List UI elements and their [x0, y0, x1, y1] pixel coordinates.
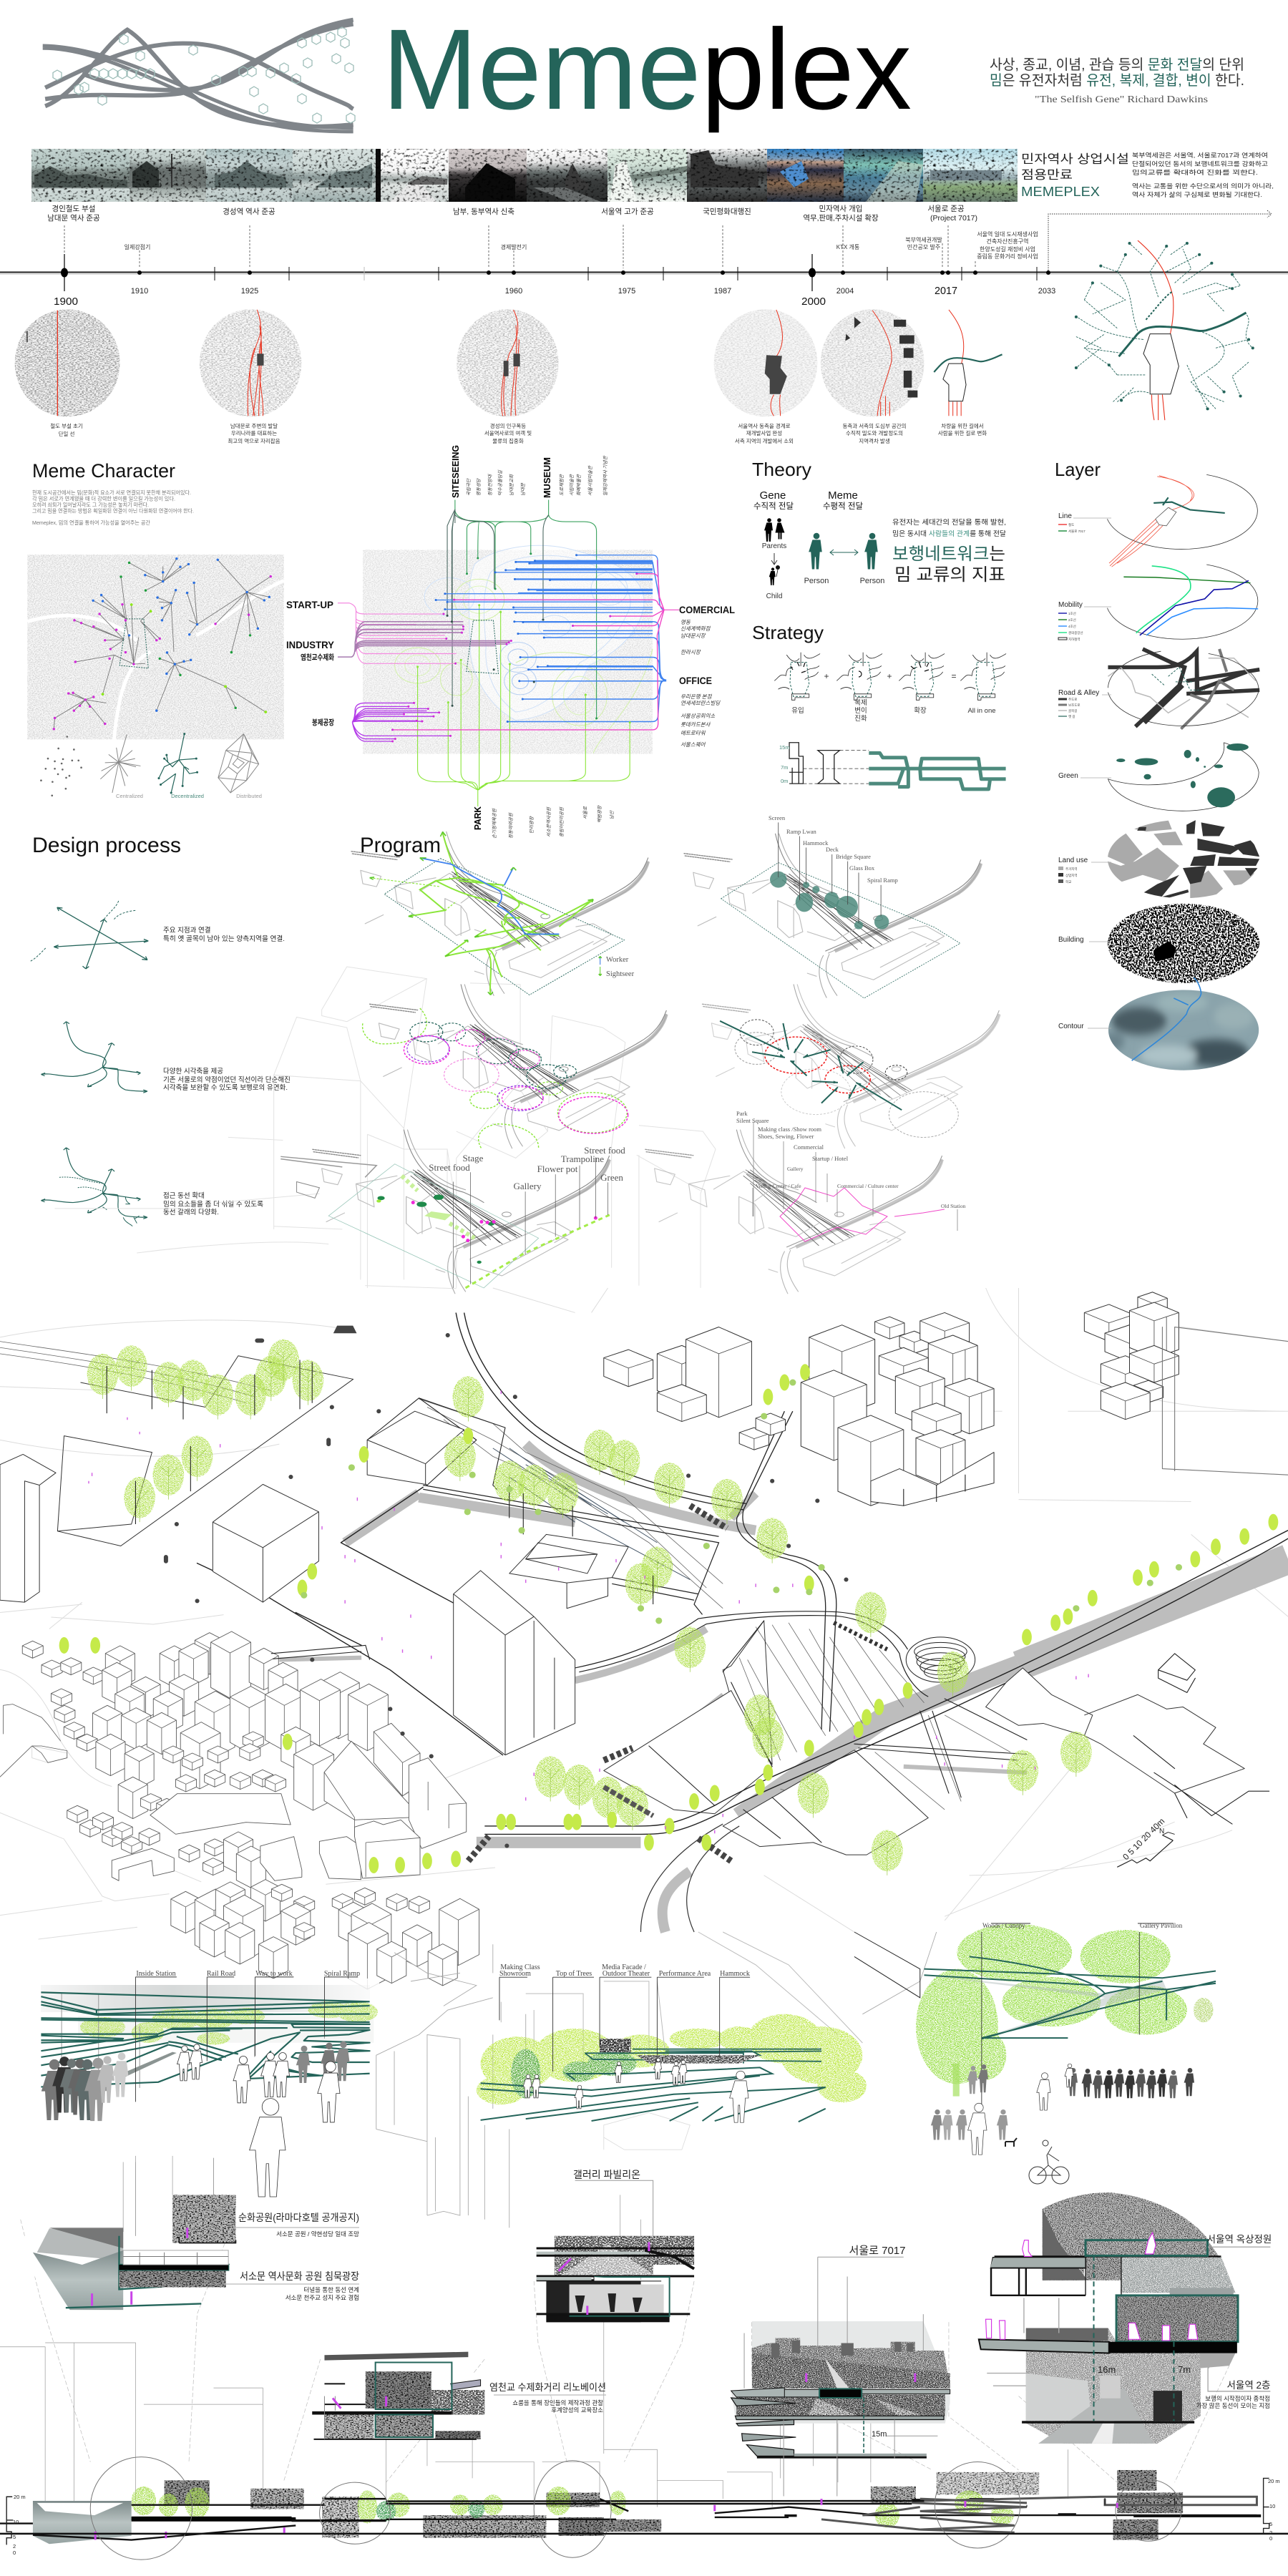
icon: cyclist and dog: [1005, 2138, 1069, 2184]
chart: meme links over contour map: 중림어린이공원: [559, 806, 565, 837]
history map circles: 남대문로 주변의 발달: [230, 422, 278, 429]
section diagram: levels 0m 7m 15m: 0m: [781, 778, 788, 784]
history map circles: 재개발사업 완성: [746, 429, 782, 436]
section diagram: levels 0m 7m 15m: 15m: [779, 744, 790, 751]
diagram: gene vs meme transmission: [753, 489, 884, 600]
chart: meme links over contour map: 연세세브란스빌딩: [680, 700, 721, 706]
chart: meme links over contour map: 시립미술관: [569, 474, 575, 496]
chart: meme links over contour map: 일제강제역사 기념관: [602, 455, 608, 496]
heading: Program: Program: [360, 834, 441, 857]
diagram: gene vs meme transmission: Person: [860, 577, 884, 585]
strategy axonometric: program elements: Glass Box: [849, 864, 875, 872]
detail circle: Seosomun park: [21, 2195, 359, 2312]
timeline: 1925: [241, 287, 258, 296]
timeline: 국민평화대행진: [703, 208, 751, 216]
chart: meme links over contour map: 서울스퀘어: [680, 741, 706, 748]
program: uses axonometric: Flower pot: [537, 1163, 578, 1174]
perspective: central garden: Hammock: [720, 1970, 750, 1978]
strategy diagrams: +: [887, 671, 892, 681]
detail circle: Yeomcheongyo shoe street: 염천교 수제화거리 리노베이션: [489, 2382, 606, 2393]
meme character paragraph: Memeplex, 밈의 연결을 통하여 가능성을 열어주는 공간: [32, 519, 150, 526]
program: uses axonometric: Stage: [463, 1153, 484, 1163]
strategy diagrams: 확장: [914, 706, 927, 715]
layer stack maps: 골목길: [1068, 708, 1077, 713]
timeline: 2017: [935, 285, 957, 297]
detail circle: Yeomcheongyo shoe street: [312, 2352, 606, 2439]
strategy axonometric: commercial programs: [645, 1110, 966, 1294]
chart: meme links over contour map: 정동전망대: [487, 474, 493, 496]
chart: meme links over contour map: 도로체험관: [559, 474, 565, 496]
callout: pedestrian network as meme index: [892, 518, 1006, 585]
chart: meme links over contour map: OFFICE: [679, 675, 712, 686]
layer stack maps: 4호선: [1068, 624, 1076, 628]
layer stack maps: [1058, 474, 1259, 1070]
strategy axonometric: commercial programs: Shoes, Sewing, Flower: [758, 1133, 814, 1140]
chart: meme links over contour map: SITESEEING: [450, 445, 461, 498]
project summary text: 역사는 교통을 위한 수단으로서의 의미가 아니라,: [1132, 182, 1274, 190]
timeline: 2004: [836, 287, 854, 296]
design process step diagrams: 시각축을 보완할 수 있도록 보행로의 유연화.: [163, 1083, 288, 1092]
callout: pedestrian network as meme index: 밈은 동시대 사람들의 관계를 통해 전달: [892, 530, 1006, 538]
timeline: 1900: [54, 296, 78, 308]
perspective: central garden: [477, 1932, 867, 2122]
detail circle: Seosomun park: 서소문 공원 / 약현성당 일대 조망: [276, 2230, 359, 2238]
layer stack maps: Mobility: [1058, 601, 1083, 609]
chart: meme links over contour map: 화폐박물관: [576, 474, 582, 496]
meme character paragraph: 현재 도시공간에서는 밈(문화)적 요소가 서로 연결되지 못한채 분리되어있다.: [32, 489, 191, 496]
layer stack maps: 경의중앙선: [1068, 630, 1083, 635]
typology labels: Centralized: [116, 793, 143, 799]
perspective: central garden: Media Facade /: [602, 1963, 646, 1971]
diagram: gene vs meme transmission: Parents: [762, 542, 786, 550]
timeline: 경성역 역사 준공: [223, 207, 275, 216]
chart: meme links over contour map: 손기정체육공원: [492, 808, 497, 839]
chart: meme links over contour map: 우리은행 본점: [680, 693, 713, 700]
chart: meme links over contour map: 만리광장: [529, 816, 535, 834]
project summary text: 민자역사 상업시설: [1021, 152, 1129, 166]
chart: meme links over contour map: 명동: [680, 619, 691, 625]
timeline: 중림동 문화거리 정비사업: [977, 253, 1038, 260]
project summary text: 점용만료: [1021, 168, 1073, 182]
perspective: inside station: Spiral Ramp: [324, 1970, 360, 1978]
chart: meme links over contour map: MUSEUM: [542, 457, 552, 498]
layer stack maps: 보조도로: [1068, 703, 1080, 707]
strategy diagrams: 변이: [854, 707, 867, 715]
detail circle: Seoul station: 7m: [1178, 2364, 1191, 2375]
history map circles: 동측과 서측의 도심부 공간의: [842, 422, 907, 429]
title: Memeplex: [382, 5, 912, 133]
design process step diagrams: 주요 지점과 연결: [163, 926, 210, 935]
program: uses axonometric: Street food: [584, 1145, 625, 1156]
detail circle: Yeomcheongyo shoe street: 쇼룸을 통해 장인들의 제작과정 관찰: [512, 2399, 603, 2406]
design process step diagrams: 특히 옛 골목이 남아 있는 양측지역을 연결.: [163, 935, 285, 943]
subtitle: definition of meme: "The Selfish Gene" Richard Dawkins: [1035, 94, 1208, 104]
layer stack maps: 지하철역: [1068, 637, 1080, 642]
chart: meme links over contour map: 백범광장: [597, 805, 602, 823]
project summary text: MEMEPLEX: [1021, 185, 1100, 199]
network typologies: [41, 734, 259, 796]
program: uses axonometric: Green: [600, 1172, 623, 1183]
plaza blocks: [57, 1356, 353, 1546]
timeline: 2000: [801, 296, 826, 308]
layer stack maps: 주도로: [1068, 698, 1077, 702]
diagram: gene vs meme transmission: Gene: [760, 489, 786, 502]
long bottom section: 0: [13, 2550, 16, 2556]
timeline: 1975: [618, 287, 635, 296]
strategy diagrams: All in one: [967, 707, 996, 715]
perspective: inside station: Way to work: [255, 1970, 293, 1978]
logo: DNA strands with hexagon molecules: [43, 20, 355, 132]
detail circle: Seoul station: 16m: [1098, 2364, 1116, 2375]
detail circle: Seoullo 7017: 서울로 7017: [849, 2245, 905, 2257]
chart: meme links over contour map: 서울로: [582, 806, 588, 819]
history map circles: [15, 240, 1253, 444]
strategy axonometric: program elements: Hammock: [803, 839, 829, 847]
program: uses axonometric: Street food: [429, 1162, 470, 1173]
long bottom section: 0: [1269, 2535, 1272, 2542]
heading: Strategy: Strategy: [752, 622, 824, 643]
timeline: (Project 7017): [930, 214, 977, 223]
subtitle: definition of meme: [990, 57, 1244, 104]
typology labels: Decentralized: [171, 793, 204, 799]
left neighbourhood building cluster: [0, 1615, 501, 1989]
detail circle: Seosomun park: 서소문 역사문화 공원 침묵광장: [240, 2270, 359, 2282]
detail circle: Seoullo 7017: 15m: [872, 2430, 887, 2439]
strategy axonometric: program elements: Ramp Lwan: [786, 828, 817, 835]
detail circle: Yeomcheongyo shoe street: 후계양성의 교육장소: [551, 2406, 603, 2414]
station building: [986, 1668, 1244, 1793]
perspective: canopy and pavilion: [854, 1922, 1216, 2184]
strategy axonometric: program elements: Spiral Ramp: [867, 877, 898, 884]
layer stack maps: 1호선: [1068, 611, 1076, 615]
timeline: 1960: [505, 287, 522, 296]
timeline: 남대문 역사 준공: [47, 214, 100, 223]
heading: Meme Character: Meme Character: [32, 460, 175, 482]
layer stack maps: 주거지역: [1065, 867, 1078, 872]
meme character paragraph: [32, 489, 194, 526]
chart: meme links over contour map: 염천교수제화: [301, 653, 334, 662]
chart: meme links over contour map: 남산: [609, 810, 615, 819]
detail circle: gallery pavilion: [537, 2169, 694, 2322]
strategy axonometric: commercial programs: Park: [736, 1110, 748, 1117]
strategy diagrams: +: [824, 671, 829, 681]
layer stack maps: 학교: [1065, 879, 1071, 884]
history map circles: 서울역사 동측을 경계로: [738, 422, 791, 429]
left tall tower: [0, 1454, 56, 1602]
long bottom section: 5: [1269, 2521, 1272, 2527]
detail circle: Seoullo 7017: [731, 2245, 950, 2496]
long bottom section: 20 m: [1268, 2478, 1280, 2484]
perspective: inside station: [29, 1970, 379, 2197]
timeline: 민자역사 개입: [819, 204, 862, 213]
perspective: canopy and pavilion: Gallery Pavillon: [1140, 1922, 1183, 1929]
strategy diagrams: [775, 653, 1006, 723]
history map circles: 서울역사로의 여객 및: [484, 429, 532, 436]
timeline: KTX 개통: [836, 243, 859, 250]
chart: meme links over contour map: 서울상공회의소: [680, 713, 715, 719]
strategy axonometric: program elements: Screen: [769, 814, 786, 821]
project summary text: 역사 자체가 삶의 구심체로 변화될 기대한다.: [1132, 191, 1262, 198]
ghost tall towers between perspectives: [123, 1932, 937, 2236]
history map circles: 지역격차 발생: [859, 437, 890, 444]
project summary text: [1021, 151, 1274, 199]
layer stack maps: Contour: [1058, 1023, 1084, 1030]
section zoom guide lines and thin frames: [0, 2156, 1232, 2507]
program: node circles axonometric: [363, 985, 666, 1148]
strategy axonometric: commercial programs: Commercial / Culture center: [837, 1183, 899, 1189]
long bottom section: 10: [1269, 2503, 1275, 2509]
perspective: central garden: Performance Area: [659, 1970, 711, 1978]
strategy axonometric: commercial programs: Making class /Show room: [758, 1126, 821, 1133]
design process step diagrams: 동선 갈래의 다양화.: [163, 1208, 219, 1216]
diagram: gene vs meme transmission: Person: [804, 577, 829, 585]
strategy axonometric: commercial programs: Startup / Hotel: [812, 1155, 849, 1162]
spiral ramp: [906, 1637, 975, 1682]
program: uses axonometric: [280, 1130, 625, 1294]
timeline: 서울역 고가 준공: [601, 208, 654, 216]
chart: meme links over contour map: 신세계백화점: [680, 625, 711, 632]
shadow of Seoullo deck: [279, 1444, 1288, 1932]
cross walks: [468, 1506, 731, 1861]
perspective: central garden: Outdoor Theater: [602, 1970, 650, 1978]
chart: meme links over contour map: START-UP: [286, 599, 333, 610]
layer stack maps: Building: [1058, 936, 1084, 944]
layer stack maps: 서울로 7017: [1068, 529, 1085, 534]
chart: meme links over contour map: 봉제공장: [312, 718, 334, 727]
chart: meme links over contour map: INDUSTRY: [286, 639, 335, 650]
design process step diagrams: [29, 901, 291, 1226]
timeline: [0, 204, 1288, 308]
project summary text: 북부역세권은 서울역, 서울로7017과 연계하여: [1132, 151, 1268, 159]
layer stack maps: Road & Alley: [1058, 689, 1099, 697]
timeline: 한양도성길 재정비 사업: [980, 245, 1035, 253]
heading: Layer: Layer: [1055, 459, 1101, 480]
planters, people, vehicles: [89, 1328, 1179, 1845]
design process step diagrams: 접근 동선 확대: [163, 1191, 205, 1200]
program: circulation axonometric: Worker: [606, 956, 629, 964]
detail circle: Seosomun park: 터널을 통한 동선 연계: [304, 2286, 359, 2293]
detail circle: gallery pavilion: 갤러리 파빌리온: [573, 2169, 640, 2180]
history map circles: 수직적 밀도와 개발정도의: [846, 429, 903, 436]
program: uses axonometric: Trampoline: [561, 1153, 604, 1164]
chart: meme links over contour map: 남대문시장: [680, 633, 706, 639]
strategy axonometric: commercial programs: Vendor Center / Cafe: [756, 1183, 801, 1189]
layer stack maps: 상업지역: [1065, 873, 1078, 878]
detail circle: Seosomun park: 순화공원(라마다호텔 공개공지): [238, 2212, 359, 2223]
chart: meme links over contour map: COMERCIAL: [679, 604, 735, 615]
lime tree clusters: [87, 1340, 1092, 1875]
timeline: 1910: [131, 287, 148, 296]
detail circle: Seoul station: [979, 2192, 1272, 2444]
chart: meme links over contour map: 남대문: [520, 482, 526, 496]
diagram: gene vs meme transmission: Meme: [828, 489, 858, 502]
main axonometric drawing of Seoul station area: [0, 1288, 1288, 1932]
long bottom section: 10: [13, 2519, 19, 2525]
section diagram: levels 0m 7m 15m: [779, 743, 1006, 789]
callout: pedestrian network as meme index: 밈 교류의 지표: [894, 565, 1005, 585]
layer stack maps: Land use: [1058, 857, 1088, 864]
chart: meme links over contour map: 서소문역사공원: [546, 806, 552, 837]
history map circles: 사람을 위한 길로 변화: [938, 430, 987, 436]
history map circles: 철도 부설 초기: [50, 422, 83, 429]
Seoullo elevated walkway: [484, 1531, 1288, 1826]
perspective: inside station: Inside Station: [136, 1970, 176, 1978]
layer stack maps: 옛 길: [1068, 714, 1075, 719]
history map circles: 경성의 인구폭등: [490, 422, 526, 429]
callout: pedestrian network as meme index: 보행네트워크는: [892, 545, 1005, 564]
strategy axonometric: commercial programs: Silent Square: [736, 1117, 769, 1124]
project summary text: 단절되어있던 동서의 보행네트워크를 강화하고: [1132, 160, 1268, 167]
timeline: 경인철도 부설: [52, 204, 95, 213]
program: uses axonometric: Gallery: [514, 1181, 542, 1191]
chart: meme links over contour map: 한라시장: [680, 649, 701, 655]
diagram: gene vs meme transmission: 수직적 전달: [753, 501, 794, 511]
far right tower cluster: [1084, 1292, 1179, 1420]
timeline: 건축자산진흥구역: [987, 238, 1028, 245]
callout: pedestrian network as meme index: 유전자는 세대간의 전달을 통해 발현,: [892, 518, 1006, 527]
long bottom section: [0, 2457, 1288, 2560]
section diagram: levels 0m 7m 15m: 7m: [781, 764, 788, 771]
meme network map: [27, 555, 284, 739]
timeline: 북부역세권개발: [905, 236, 942, 243]
chart: meme links over contour map: 국립극단: [466, 478, 472, 496]
chart: meme links over contour map: 서울시립미술관: [587, 465, 593, 496]
design process step diagrams: 다양한 시각축을 제공: [163, 1067, 223, 1075]
long bottom section: 5: [13, 2534, 16, 2540]
layer stack maps: 2호선: [1068, 618, 1076, 622]
long bottom section: 2: [13, 2543, 16, 2550]
strategy diagrams: 유입: [791, 706, 804, 715]
detail circle: Seoul station: 서울역 옥상정원: [1207, 2234, 1272, 2245]
program: circulation axonometric: [351, 831, 648, 995]
meme character paragraph: 오히려 쇠퇴가 일어날지라도 그 가능성은 놓치기 마련다.: [32, 501, 149, 508]
timeline: 일제강점기: [125, 243, 150, 250]
strategy axonometric: commercial programs: Old Station: [941, 1203, 966, 1209]
ghost context buildings behind program diagrams: [55, 967, 716, 1289]
timeline: 2033: [1038, 287, 1055, 296]
perspective: canopy and pavilion: Woods / Canopy: [982, 1922, 1025, 1929]
project summary text: 밈의교류를 확대하여 진화를 꾀한다.: [1132, 168, 1258, 176]
chart: meme links over contour map: 명동성당: [476, 478, 482, 496]
strategy diagrams: 진화: [854, 715, 867, 723]
rail tracks: [0, 1342, 1010, 1828]
timeline: 서울로 준공: [927, 205, 965, 213]
timeline: 경제발전기: [501, 243, 527, 250]
detail circle: Seoul station: 보행의 시작점이자 종착점: [1205, 2395, 1270, 2402]
chart: meme links over contour map: 덕수궁돌담길: [497, 469, 503, 496]
timeline: 남부, 동부역사 신축: [453, 208, 514, 216]
chart: meme links over contour map: [286, 445, 735, 839]
chart: meme links over contour map: 정동야외공원: [508, 812, 514, 839]
history map circles: 우리나라를 대표하는: [231, 429, 277, 436]
history map circles: 최고의 역으로 자리잡음: [228, 437, 280, 444]
history map circles: 물류의 집중화: [492, 437, 524, 444]
long bottom section: 20 m: [14, 2494, 26, 2500]
north mark: N: [1159, 1828, 1164, 1835]
small planting on decks: [59, 1364, 1278, 1873]
chart: meme links over contour map: PARK: [472, 806, 483, 830]
chart: meme links over contour map: 메트로타워: [680, 730, 706, 736]
history map circles: 차량을 위한 길에서: [941, 423, 984, 429]
perspective: central garden: Top of Trees: [556, 1970, 592, 1978]
meme character paragraph: 그리고 밈을 연결하는 방법은 획일화된 연결이 아닌 다원화된 연결이어야 한다.: [32, 507, 194, 514]
strategy diagrams: =: [951, 671, 957, 681]
detail circle: Seoul station: 가장 많은 동선이 모이는 지점: [1196, 2402, 1270, 2409]
program: circulation axonometric: Sightseer: [606, 970, 635, 978]
history map circles: 단일 선: [59, 430, 74, 437]
layer stack maps: Line: [1058, 512, 1072, 520]
strategy axonometric: program elements: Bridge Square: [836, 853, 871, 860]
strategy axonometric: commercial programs: Commercial: [794, 1143, 824, 1151]
layer stack maps: Green: [1058, 772, 1078, 780]
subtitle: definition of meme: 밈은 유전자처럼 유전, 복제, 결합, 변이 한다.: [990, 72, 1244, 89]
perspective: central garden: Showroom: [499, 1970, 531, 1978]
scale bar: [1117, 1835, 1173, 1867]
timeline: 서울역 일대 도시재생사업: [977, 230, 1038, 238]
strategy axonometric: program elements: Deck: [826, 846, 839, 853]
top right cluster buildings: [604, 1312, 994, 1506]
design process step diagrams: 기존 서울로의 약점이었던 직선이라 단순해진: [163, 1075, 291, 1084]
heading: Theory: Theory: [752, 459, 811, 480]
strategy axonometric: commercial programs: Gallery: [787, 1166, 804, 1172]
chart: meme links over contour map: 롯데카드본사: [680, 721, 711, 728]
design process step diagrams: 밈의 요소들을 좀 더 섞일 수 있도록: [163, 1200, 263, 1209]
history map circles: 서측 지역의 개발에서 소외: [735, 437, 794, 444]
layer stack maps: 철도: [1068, 522, 1074, 527]
strategy axonometric: access arrows: [703, 985, 999, 1148]
perspective: inside station: Rail Road: [207, 1970, 235, 1978]
photo strip: history of Seoul station: [31, 149, 1018, 202]
long bottom section: 2: [1269, 2529, 1272, 2536]
subtitle: definition of meme: 사상, 종교, 이념, 관습 등의 문화 전달의 단위: [990, 57, 1244, 73]
typology labels: [116, 793, 262, 799]
perspective: central garden: Making Class: [500, 1963, 540, 1971]
diagram: gene vs meme transmission: Child: [766, 592, 782, 600]
timeline: 역무,판매,주차시설 확장: [803, 213, 879, 223]
detail circle: Seosomun park: 서소문 천주교 성지 주요 경험: [286, 2294, 359, 2301]
diagram: gene vs meme transmission: 수평적 전달: [823, 501, 863, 511]
strategy diagrams: 복제: [854, 699, 867, 707]
scale label: 0 5 10 20 40m: [1121, 1816, 1166, 1862]
chart: meme links over contour map: 남대문교회: [509, 474, 514, 496]
heading: Design process: Design process: [32, 834, 181, 857]
typology labels: Distributed: [236, 793, 262, 799]
meme character paragraph: 각 밈은 서로가 연계됐을 때 더 강력한 변이를 일으킬 가능성이 있다.: [32, 495, 175, 502]
strategy axonometric: program elements: [684, 814, 981, 998]
timeline: 민간공모 발주: [907, 243, 940, 250]
timeline: 1987: [714, 287, 731, 296]
detail circle: Seoul station: 서울역 2층: [1227, 2380, 1270, 2391]
